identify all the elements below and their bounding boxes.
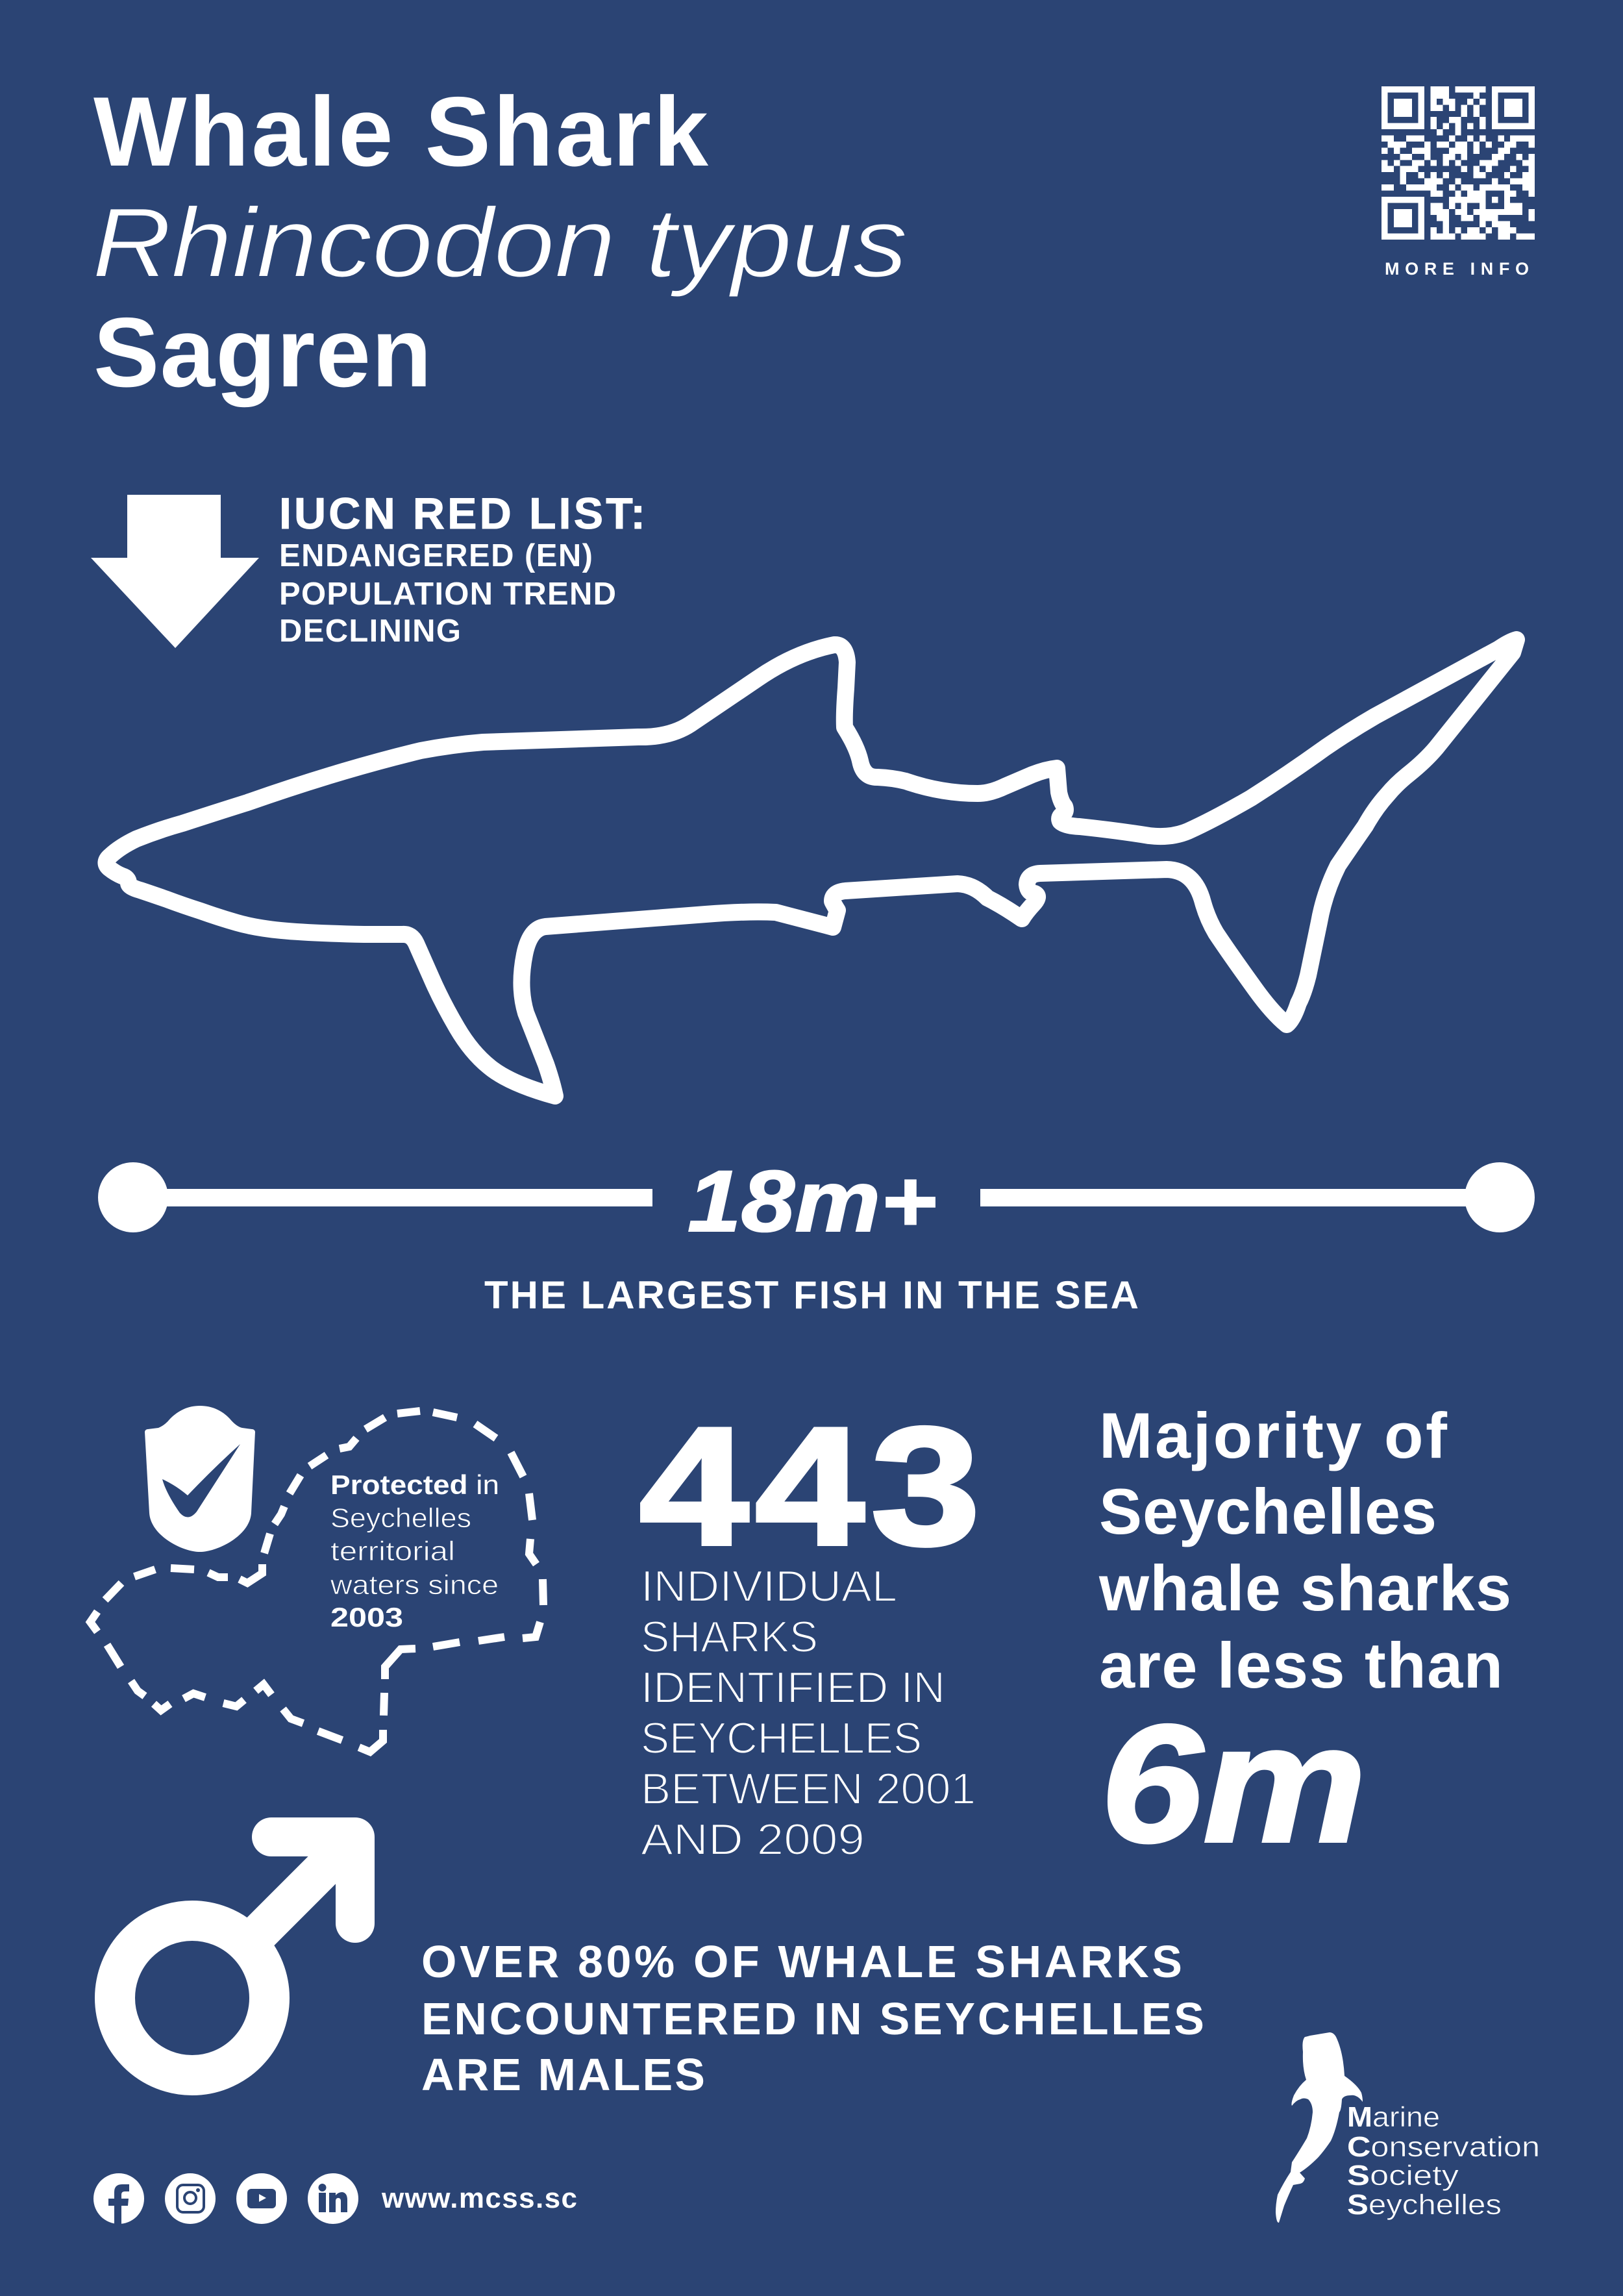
status line: declining: DECLINING: [279, 614, 461, 649]
icon: whale shark silhouette: [1276, 2032, 1363, 2223]
statement: over 80% males: OVER 80% OF WHALE SHARKS: [421, 1936, 1182, 1987]
organisation name: [1347, 2101, 1540, 2221]
status line: population trend: POPULATION TREND: [279, 577, 616, 612]
big number: 443: 443: [639, 1393, 987, 1580]
organisation name: Seychelles: [1347, 2189, 1502, 2221]
big number: 6m: 6m: [1100, 1690, 1367, 1877]
QR code with more info caption: [1381, 86, 1535, 279]
icon: instagram: [165, 2173, 216, 2224]
organisation name: Society: [1347, 2160, 1459, 2191]
statement: over 80% males: ARE MALES: [421, 2049, 705, 2100]
icon: shield with check mark: [145, 1406, 255, 1552]
text: protected since 2003: Seychelles: [330, 1503, 471, 1533]
scale line left with end dot: [98, 1162, 652, 1232]
caption: largest fish: THE LARGEST FISH IN THE SEA: [484, 1273, 1139, 1317]
statement: over 80% males: [421, 1936, 1204, 2100]
text: protected since 2003: 2003: [330, 1602, 403, 1632]
title: names of the whale shark: [92, 77, 908, 408]
description of identified sharks: [641, 1562, 976, 1864]
dashed outline of territorial waters: [90, 1411, 543, 1752]
text: protected since 2003: waters since: [330, 1569, 499, 1600]
caption: more info: MORE INFO: [1385, 259, 1529, 279]
description of identified sharks: SHARKS: [641, 1612, 818, 1662]
heading: local name: Sagren: [93, 297, 432, 408]
icon: QR code: [1381, 86, 1535, 240]
logo: Marine Conservation Society Seychelles: [1276, 2032, 1540, 2223]
statement: majority of whale sharks: whale sharks: [1098, 1552, 1511, 1624]
text: protected since 2003: territorial: [330, 1536, 455, 1566]
scale line right with end dot: [980, 1162, 1535, 1232]
text: protected since 2003: [330, 1469, 499, 1632]
statement: majority of whale sharks: are less than: [1099, 1629, 1503, 1701]
description of identified sharks: INDIVIDUAL: [641, 1562, 897, 1611]
description of identified sharks: BETWEEN 2001: [641, 1764, 976, 1814]
description of identified sharks: SEYCHELLES: [641, 1714, 922, 1763]
shark outline illustration: [106, 640, 1517, 1096]
status line: endangered: ENDANGERED (EN): [279, 538, 593, 573]
organisation name: Marine: [1347, 2101, 1440, 2133]
statement: majority of whale sharks: Seychelles: [1099, 1475, 1437, 1547]
icon: youtube: [236, 2173, 287, 2224]
icon: male symbol: [115, 1837, 355, 2075]
statement: majority of whale sharks: [1098, 1399, 1511, 1701]
icon: down arrow for declining population: [91, 495, 259, 648]
statement: over 80% males: ENCOUNTERED IN SEYCHELLES: [421, 1993, 1204, 2044]
social media icons: [93, 2173, 577, 2224]
heading: Whale Shark: Whale Shark: [93, 77, 708, 187]
heading: scientific name: Rhincodon typus: [92, 188, 908, 298]
panel: protected waters: [90, 1406, 543, 1752]
description of identified sharks: IDENTIFIED IN: [641, 1663, 945, 1712]
website address: www.mcss.sc: [381, 2182, 577, 2214]
length scale bar: [98, 1153, 1535, 1250]
panel: 443 individual sharks: [639, 1393, 987, 1864]
icon: linkedin: [308, 2173, 358, 2224]
text: protected since 2003: Protected in: [330, 1469, 499, 1500]
icon: facebook: [93, 2173, 144, 2224]
organisation name: Conservation: [1347, 2131, 1540, 2163]
panel: majority under 6m: [1098, 1399, 1511, 1877]
description of identified sharks: AND 2009: [641, 1815, 865, 1864]
measurement: 18m+: 18m+: [688, 1153, 937, 1250]
heading: IUCN Red List: IUCN RED LIST:: [279, 489, 645, 538]
statement: majority of whale sharks: Majority of: [1099, 1399, 1448, 1471]
IUCN status text: [279, 489, 645, 649]
